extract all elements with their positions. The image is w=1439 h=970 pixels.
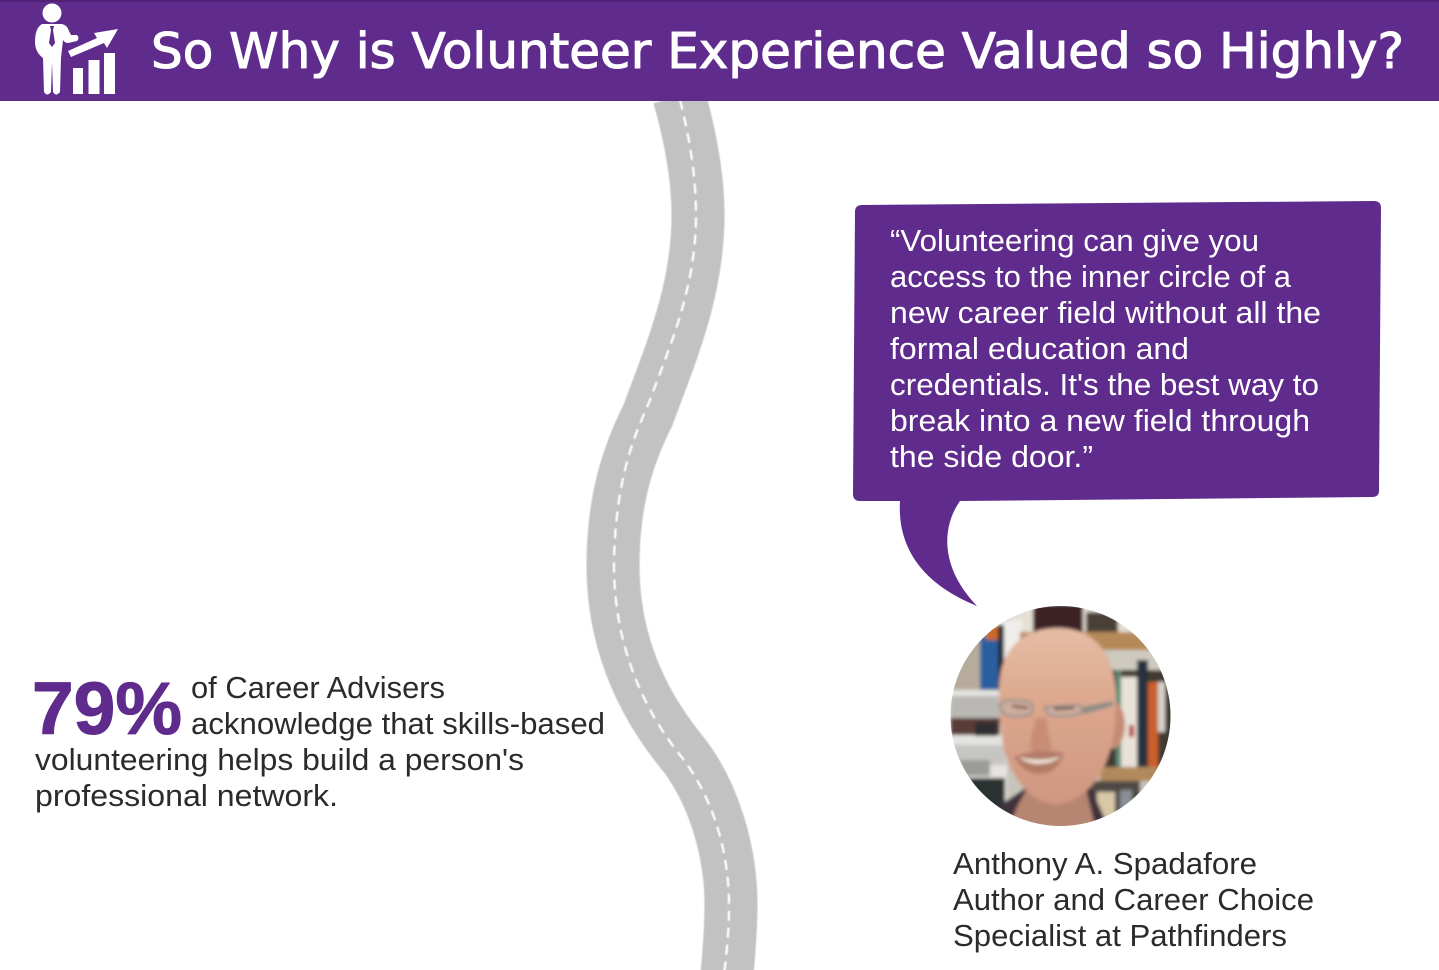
statistic: 79% of career advisers	[32, 667, 605, 813]
panel: quote speech bubble	[853, 201, 1381, 606]
quote text: formal education and	[890, 332, 1189, 366]
caption: Anthony A. Spadafore: Author and Career Choice	[953, 883, 1314, 917]
statistic: 79% of career advisers: acknowledge that skills-based	[191, 707, 605, 741]
quote text: new career field without all the	[890, 296, 1321, 330]
statistic: 79% of career advisers: 79%	[32, 667, 182, 750]
header banner	[0, 0, 1439, 101]
statistic: 79% of career advisers: professional network.	[35, 779, 338, 813]
quote text: access to the inner circle of a	[890, 260, 1291, 294]
title: So Why is Volunteer Experience Valued so Highly?	[151, 23, 1404, 80]
quote text	[890, 224, 1321, 474]
road	[613, 96, 731, 970]
caption: Anthony A. Spadafore	[953, 847, 1314, 953]
caption: Anthony A. Spadafore: Specialist at Pathfinders	[953, 919, 1287, 953]
icon: presenter with rising bar chart	[35, 4, 118, 94]
statistic: 79% of career advisers: of Career Advisers	[191, 671, 445, 705]
quote text: credentials. It's the best way to	[890, 368, 1319, 402]
caption: Anthony A. Spadafore: Anthony A. Spadafore	[953, 847, 1257, 881]
statistic: 79% of career advisers: volunteering helps build a person's	[35, 743, 524, 777]
quote text: the side door.”	[890, 440, 1093, 474]
portrait photo	[950, 606, 1170, 826]
quote text: break into a new field through	[890, 404, 1310, 438]
quote text: “Volunteering can give you	[890, 224, 1259, 258]
